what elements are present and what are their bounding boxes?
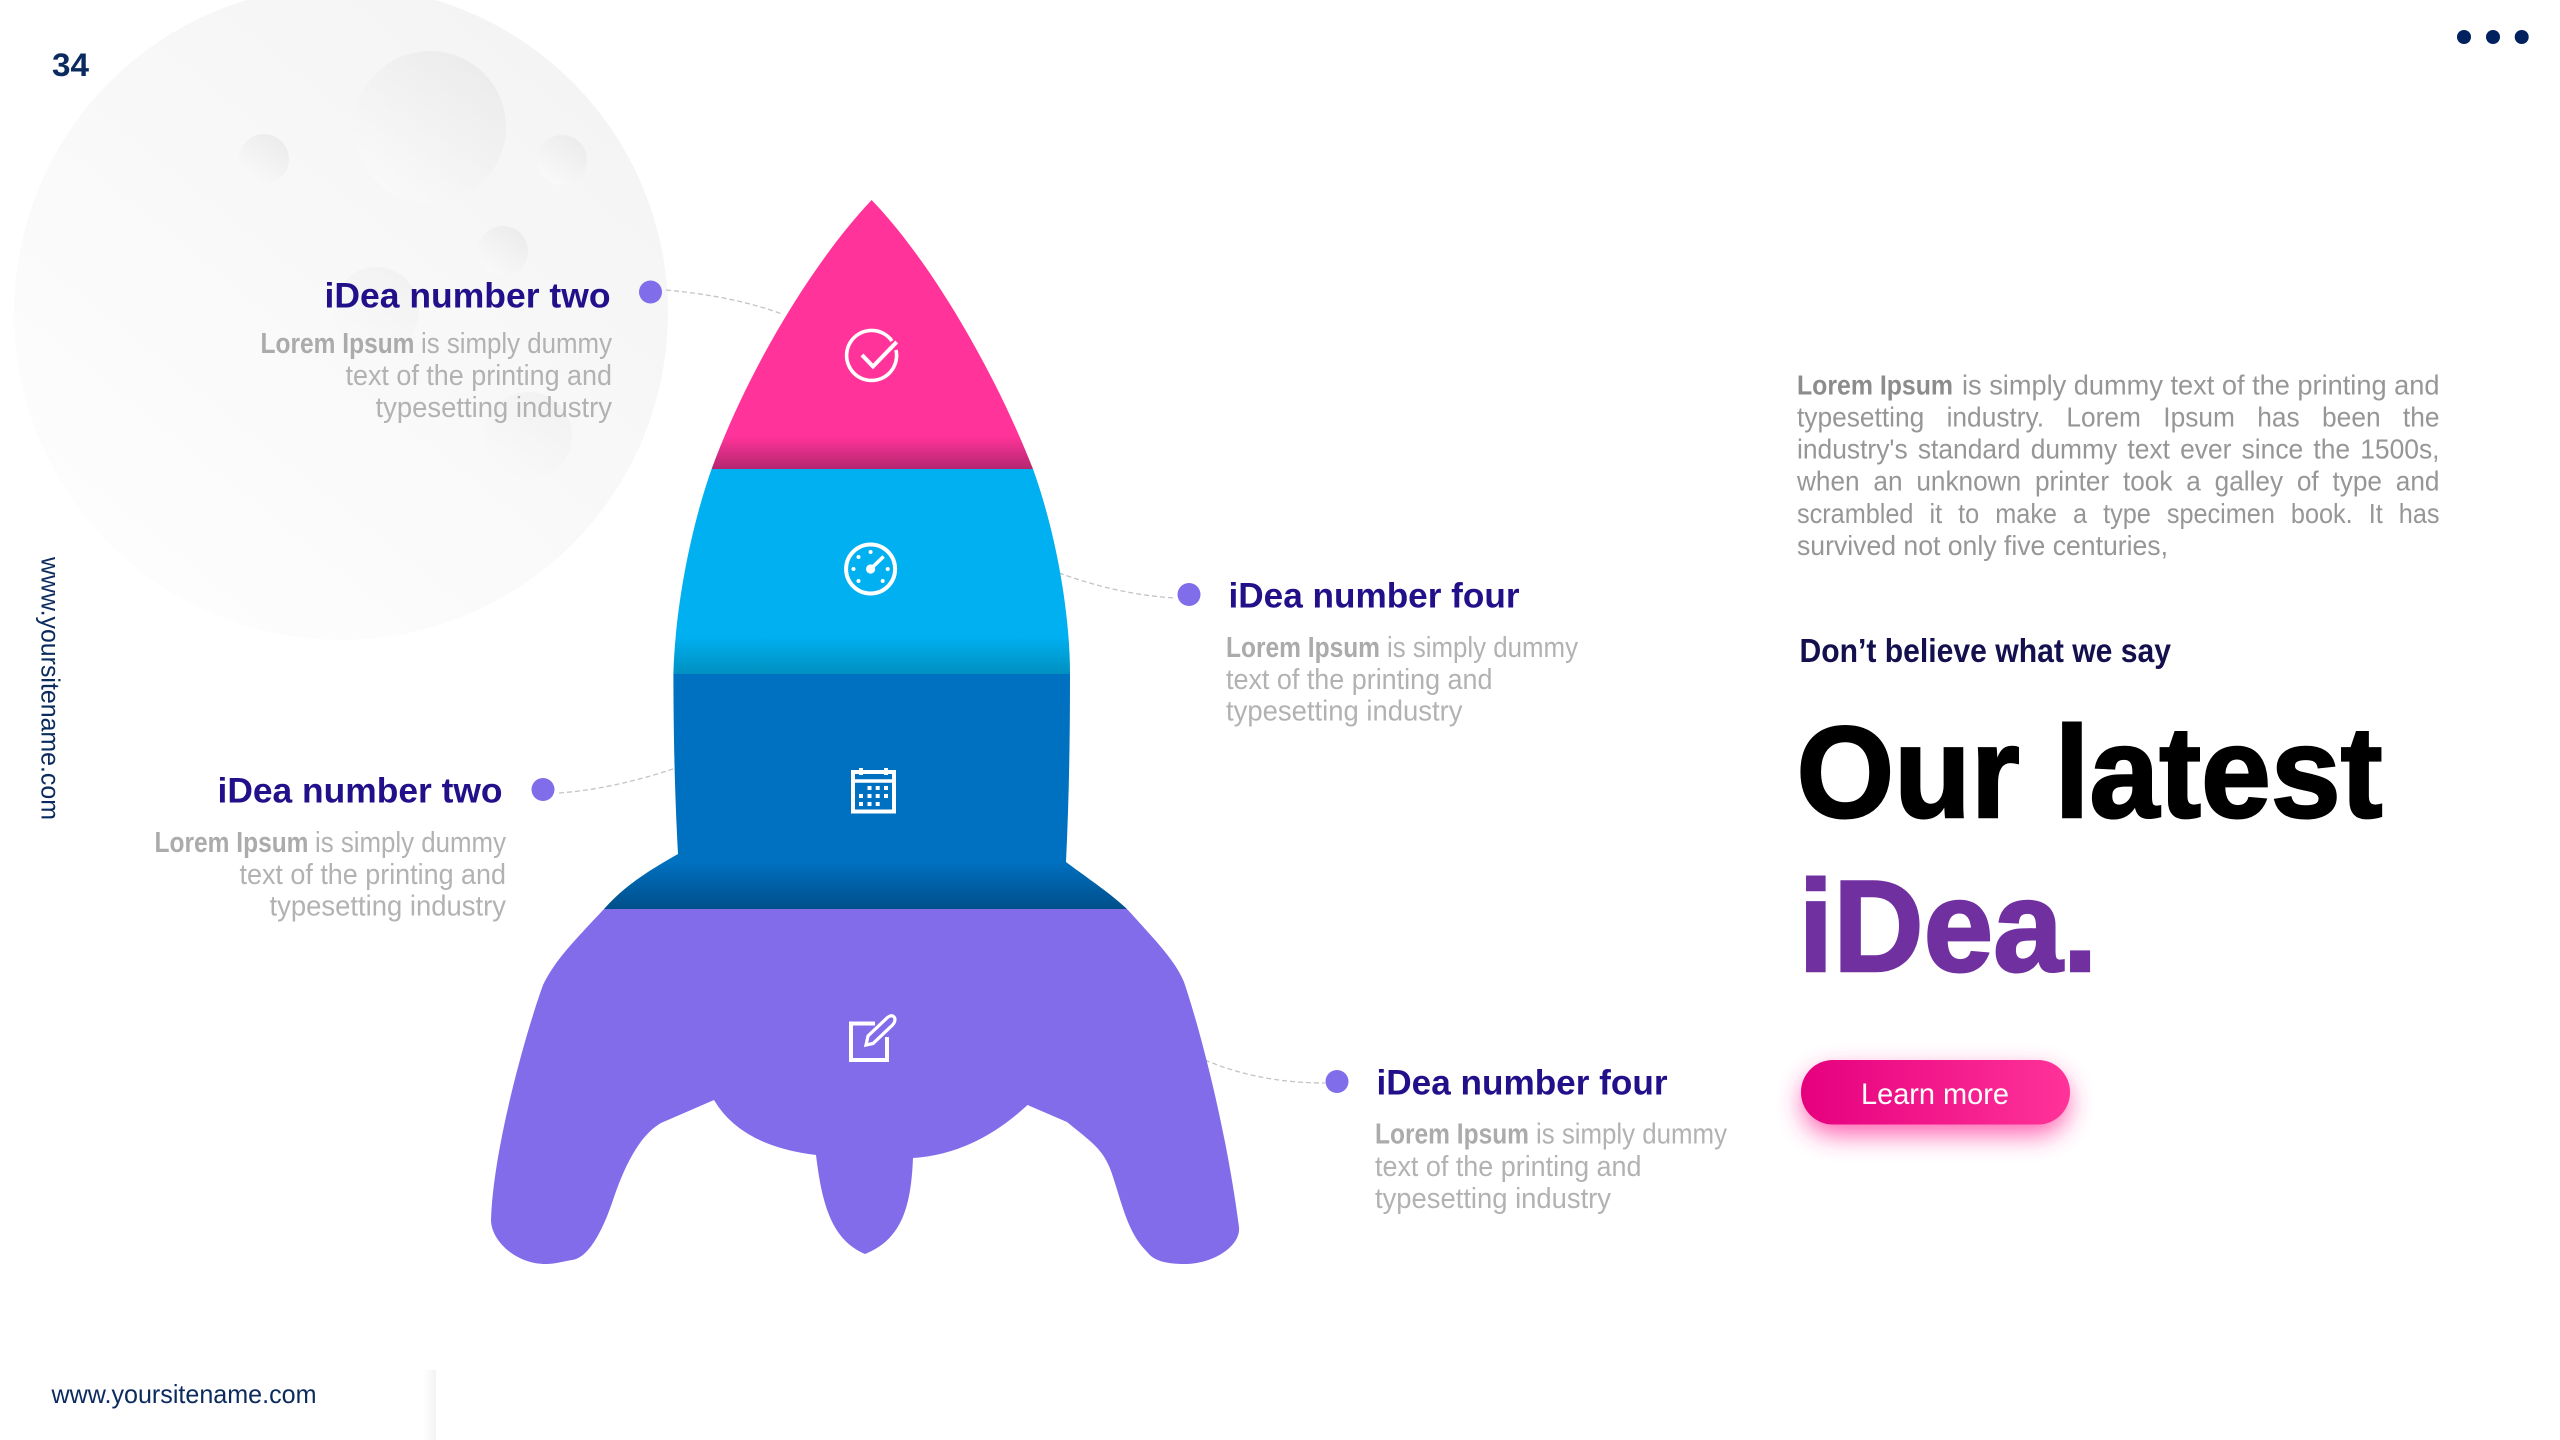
marker dot: [1326, 1070, 1348, 1093]
rocket segment: lower body: [604, 674, 1127, 909]
description: Lorem Ipsum: [1375, 1118, 1529, 1150]
rocket segment: base with fins: [480, 909, 1250, 1274]
intro paragraph: when an unknown printer took a galley of type and: [1796, 466, 2440, 496]
description: is simply dummy: [315, 827, 506, 859]
heading: iDea number four: [1228, 576, 1520, 616]
connector lines: [559, 290, 1325, 1083]
icon: check circle: [847, 330, 897, 380]
page number: 34: [52, 47, 89, 83]
description: typesetting industry: [270, 890, 506, 922]
marker dot: [1178, 583, 1200, 606]
description: text of the printing and: [1226, 664, 1492, 696]
title line: iDea: iDea.: [1798, 853, 2098, 999]
callout: idea number two lower: [154, 772, 554, 922]
description: typesetting industry: [1375, 1183, 1611, 1215]
description: Lorem Ipsum: [154, 827, 308, 859]
callout: idea number four lower: [1326, 1064, 1727, 1215]
marker dot: [532, 778, 554, 801]
heading: iDea number four: [1376, 1064, 1668, 1102]
callout: idea number two upper: [260, 276, 662, 424]
description: [260, 328, 612, 424]
marker dot: [639, 280, 662, 304]
intro paragraph: is simply dummy text of the printing and: [1962, 370, 2440, 400]
icon: speed gauge: [846, 544, 895, 594]
intro paragraph: survived not only five centuries,: [1797, 530, 2168, 561]
intro paragraph: typesetting industry. Lorem Ipsum has been the: [1797, 402, 2440, 432]
title line: Our latest: Our latest: [1796, 699, 2382, 845]
heading: iDea number two: [324, 276, 610, 316]
description: is simply dummy: [1387, 632, 1578, 664]
description: [154, 827, 506, 922]
button: learn more: [1801, 1060, 2070, 1134]
description: Lorem Ipsum: [1226, 632, 1380, 664]
description: is simply dummy: [421, 328, 612, 360]
description: text of the printing and: [346, 360, 612, 392]
rocket: [480, 190, 1250, 1274]
description: typesetting industry: [376, 392, 612, 424]
intro paragraph: [1796, 370, 2440, 561]
description: [1375, 1118, 1727, 1215]
footer website text: www.yoursitename.com: [51, 1379, 316, 1409]
moon illustration: [14, 0, 668, 640]
description: text of the printing and: [240, 859, 506, 891]
intro paragraph: industry's standard dummy text ever since the 1500s,: [1797, 434, 2440, 464]
intro paragraph: scrambled it to make a type specimen book. It has: [1797, 498, 2440, 529]
vertical website text: www.yoursitename.com: [36, 556, 66, 820]
button: learn more: Learn more: [1861, 1078, 2009, 1111]
heading: iDea number two: [218, 772, 502, 810]
callout: idea number four upper: [1178, 576, 1578, 728]
menu dots: [2457, 30, 2529, 44]
description: [1226, 632, 1578, 728]
subheading: Don’t believe what we say: [1800, 632, 2172, 669]
intro paragraph: Lorem Ipsum: [1797, 370, 1953, 400]
description: typesetting industry: [1226, 696, 1463, 728]
icon: calendar: [853, 768, 894, 812]
description: text of the printing and: [1375, 1151, 1642, 1183]
footer shadow strip: [423, 1370, 436, 1440]
icon: edit pencil: [851, 1016, 895, 1060]
description: is simply dummy: [1536, 1118, 1727, 1150]
description: Lorem Ipsum: [260, 328, 414, 360]
rocket segment: upper body: [673, 469, 1070, 674]
rocket segment: nose: [712, 200, 1033, 469]
